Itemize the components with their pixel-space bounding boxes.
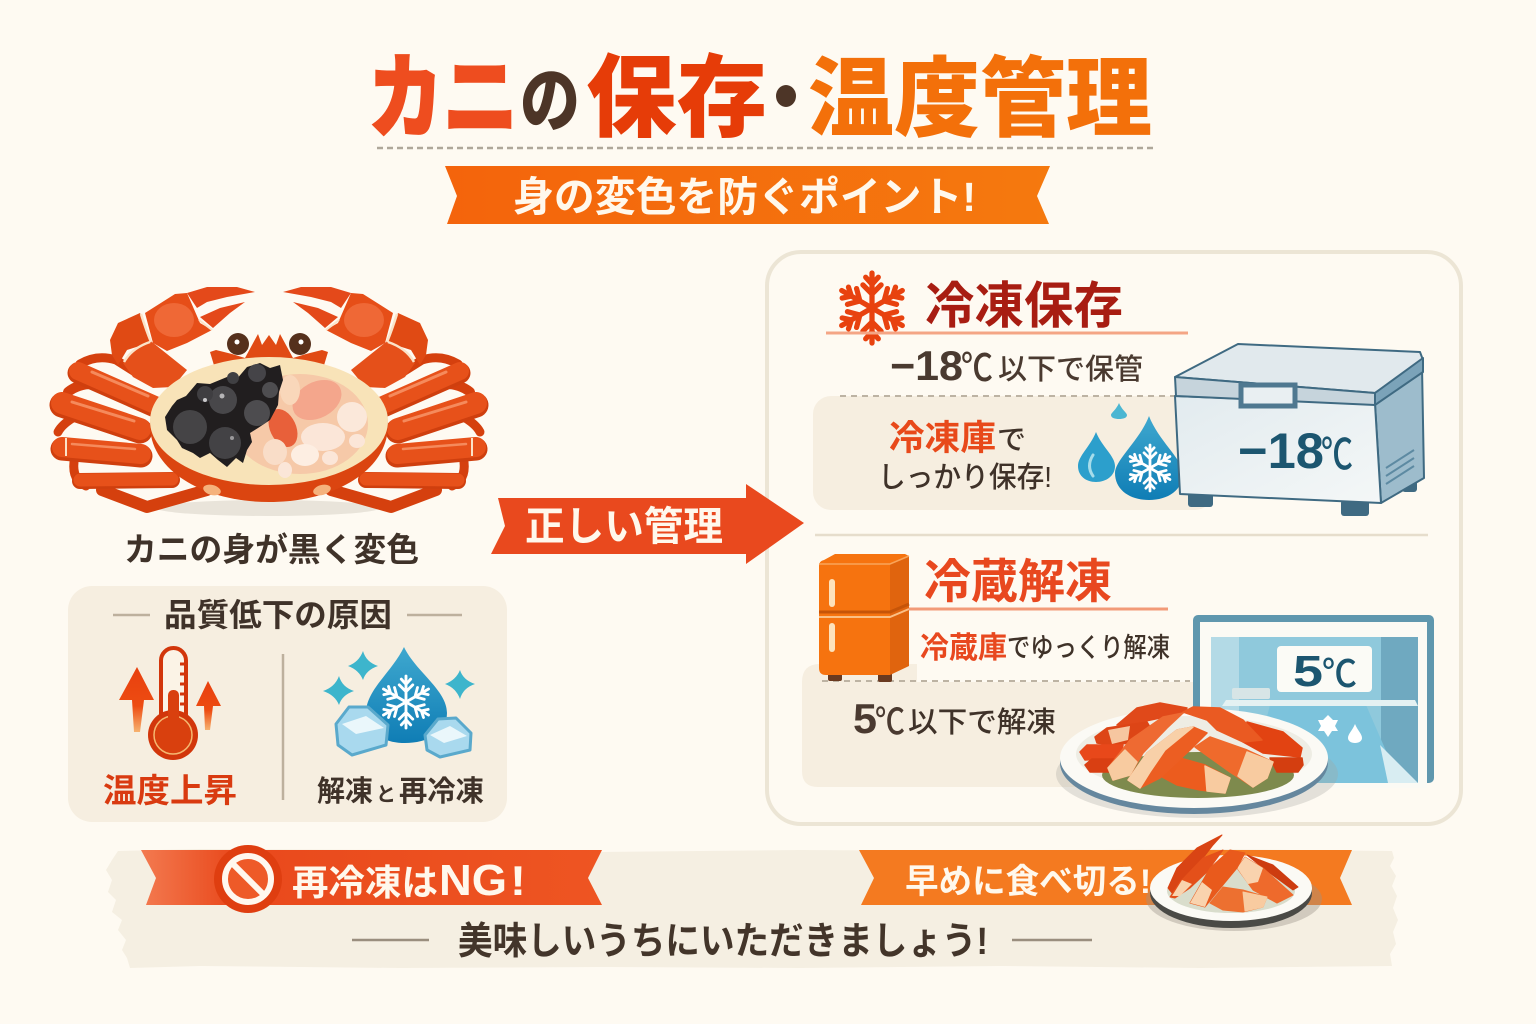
storage temperature: ℃: [961, 348, 993, 390]
note box: keep in freezer: しっかり保存!: [878, 461, 1052, 494]
note box: keep in freezer: [813, 396, 1213, 510]
thaw instruction: 冷蔵庫: [920, 632, 1007, 665]
ribbon: eat soon: [859, 850, 1352, 905]
heading: frozen storage: 冷凍保存: [925, 278, 1123, 334]
storage temperature: [890, 342, 1143, 390]
heading: refrigerator thawing: 冷蔵解凍: [924, 555, 1112, 608]
note box: keep in freezer: 冷凍庫: [889, 419, 996, 458]
label: thaw and refreeze: [317, 775, 484, 808]
panel heading: 品質低下の原因: [164, 597, 392, 633]
closing message: 美味しいうちにいただきましょう!: [458, 921, 988, 963]
ribbon: eat soon: 早めに食べ切る!: [905, 863, 1151, 901]
illustration: chest freezer: −18: [1238, 423, 1324, 479]
icon: thermometer rising: [119, 648, 221, 760]
illustration: open refrigerator 5C: 5: [1293, 647, 1323, 696]
subtitle banner: [445, 166, 1050, 224]
storage temperature: −18: [890, 342, 963, 389]
title: カニ: [368, 48, 518, 150]
label: temperature rise: 温度上昇: [103, 772, 237, 809]
illustration: small plate of crab: [1146, 835, 1322, 931]
note box: thaw below 5C: ℃: [875, 701, 905, 742]
panel: storage and thawing: [767, 252, 1461, 824]
label: thaw and refreeze: 再冷凍: [399, 775, 484, 808]
panel: causes of quality loss: [68, 586, 507, 822]
arrow: correct management: 正しい管理: [525, 505, 723, 549]
thaw instruction: [920, 632, 1170, 665]
subtitle banner: 身の変色を防ぐポイント!: [513, 174, 976, 220]
title: [368, 48, 1152, 150]
ribbon: no refreezing: !: [510, 857, 526, 904]
icon: ice and snow drop: [323, 647, 475, 757]
title: の: [520, 62, 580, 142]
illustration: open refrigerator 5C: [1193, 615, 1434, 788]
arrow: correct management: [491, 484, 804, 564]
ribbon: no refreezing: 再冷凍は: [292, 862, 438, 903]
note box: thaw below 5C: 以下で解凍: [908, 706, 1056, 739]
caption: blackened crab meat: カニの身が黒く変色: [124, 531, 419, 568]
illustration: chest freezer: [1175, 344, 1424, 516]
icon: prohibition sign: [214, 845, 282, 913]
section: refrigerator thawing: [802, 554, 1434, 818]
label: thaw and refreeze: と: [376, 784, 396, 806]
illustration: plate of crab legs: [1056, 703, 1338, 818]
label: thaw and refreeze: 解凍: [317, 775, 373, 808]
thaw instruction: でゆっくり解凍: [1007, 633, 1170, 663]
note box: thaw below 5C: [802, 664, 1205, 787]
illustration: open refrigerator 5C: ℃: [1322, 654, 1357, 696]
icon: water drops: [1078, 403, 1183, 500]
note box: thaw below 5C: 5: [853, 695, 877, 742]
storage temperature: 以下で保管: [998, 353, 1143, 386]
title: 温度管理: [808, 51, 1152, 148]
note box: keep in freezer: で: [997, 424, 1026, 455]
title: 保存: [586, 49, 767, 149]
ribbon: no refreezing: NG: [439, 856, 507, 905]
bottom strip: [106, 835, 1398, 968]
section: frozen storage: [813, 273, 1424, 516]
illustration: crab with blackened meat: [58, 287, 480, 516]
icon: orange refrigerator: [819, 554, 909, 682]
ribbon: no refreezing: [141, 845, 602, 913]
icon: red snowflake: [837, 273, 907, 343]
illustration: chest freezer: ℃: [1321, 431, 1353, 478]
